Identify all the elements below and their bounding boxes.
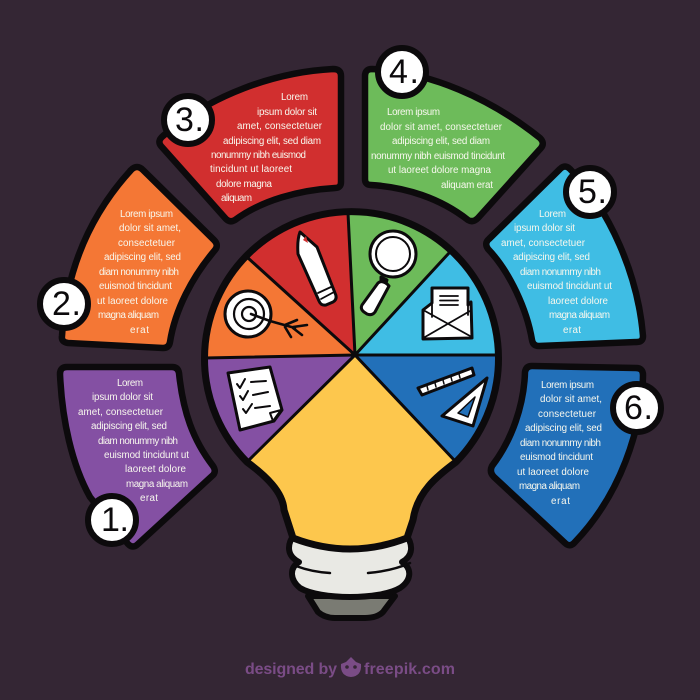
number badge 4: 4. [389,53,419,91]
icon: pencil [298,232,336,305]
panel 6 text: dolor sit amet, [540,394,602,405]
panel 5 text: ipsum dolor sit [514,223,575,234]
icon: checklist [228,367,282,430]
panel 5 text: diam nonummy nibh [520,267,601,278]
watermark: designed by freepik.com: designed by [245,661,337,678]
icon: ruler and set square [418,368,487,426]
watermark: designed by freepik.com: freepik.com [364,661,455,678]
panel 6 text: Lorem ipsum [541,380,594,391]
panel 1: purple [60,367,215,546]
panel 3 text: dolore magna [216,179,273,190]
panel 2 text: Lorem ipsum [120,209,173,220]
panel 2 text [97,209,181,336]
panel 5 text [501,209,612,336]
icon: magnifying glass [361,231,416,315]
number badge 3: 3. [175,101,204,139]
panel 3 text: nonummy nibh euismod [211,150,306,161]
panel 4 text: aliquam erat [441,180,493,191]
panel 4 text: adipiscing elit, sed diam [392,136,490,147]
panel 2 text: euismod tincidunt [99,281,172,292]
panel 6 text: ut laoreet dolore [517,467,590,478]
icon: target and arrow [225,291,307,337]
number badge 3 [164,96,212,144]
panel 6: blue [491,366,643,545]
panel 2 text: adipiscing elit, sed [104,252,181,263]
number badge 5 [566,168,614,216]
panel 4 text: Lorem ipsum [387,107,440,118]
panel 6 text: diam nonummy nibh [520,438,601,449]
panel 2 text: dolor sit amet, [119,223,181,234]
panel 2 text: magna aliquam [98,310,159,321]
icon: envelope with letter [423,288,472,339]
panel 1 text [78,378,189,504]
panel 5 text: erat [563,325,581,336]
number badge 1 [88,496,136,544]
panel 1 text: adipiscing elit, sed [91,421,167,432]
watermark: designed by freepik.com [245,657,455,678]
light bulb wheel [190,200,510,549]
panel 1 text: ipsum dolor sit [92,392,153,403]
panel 4 text: nonummy nibh euismod tincidunt [371,151,505,162]
number badge 1: 1. [101,501,129,539]
panel 2: orange [62,167,217,348]
panel 1 text: laoreet dolore [125,464,187,475]
panel 5 text: adipiscing elit, sed [513,252,590,263]
panel 5 text: Lorem [539,209,566,220]
number badge 5: 5. [578,173,607,211]
panel 3 text: tincidunt ut laoreet [210,164,292,175]
panel 5 text: magna aliquam [549,310,610,321]
panel 3 text: ipsum dolor sit [257,107,317,118]
panel 3 text: adipiscing elit, sed diam [223,136,321,147]
panel 1 text: Lorem [117,378,143,389]
panel 4 text: dolor sit amet, consectetuer [380,122,503,133]
panel 3: red [159,69,341,221]
number badge 2 [40,280,88,328]
panel 4 text: ut laoreet dolore magna [388,165,492,176]
panel 5: light blue [486,166,643,346]
panel 6 text: magna aliquam [519,481,580,492]
panel 5 text: laoreet dolore [548,296,609,307]
panel 1 text: euismod tincidunt ut [104,450,189,461]
panel 5 text: amet, consectetuer [501,238,586,249]
panel 5 text: euismod tincidunt ut [527,281,612,292]
panel 6 text: consectetuer [538,409,597,420]
bulb screw base [289,533,411,618]
panel 3 text: Lorem [281,92,308,103]
panel 3 text: amet, consectetuer [237,121,323,132]
panel 4: green [365,69,543,221]
panel 3 text [210,92,323,204]
number badge 2: 2. [52,285,81,323]
panel 1 text: erat [140,493,158,504]
panel 6 text: euismod tincidunt [520,452,593,463]
panel 6 text [517,380,602,507]
number badge 4 [378,48,426,96]
panel 1 text: amet, consectetuer [78,407,164,418]
panel 4 text [371,107,505,191]
panel 1 text: magna aliquam [126,479,188,490]
number badge 6: 6. [624,389,653,427]
panel 6 text: erat [551,496,570,507]
panel 2 text: consectetuer [118,238,176,249]
panel 3 text: aliquam [221,193,252,204]
panel 2 text: ut laoreet dolore [97,296,169,307]
panel 2 text: diam nonummy nibh [99,267,179,278]
panel 1 text: diam nonummy nibh [98,436,178,447]
panel 6 text: adipiscing elit, sed [525,423,602,434]
number badge 6 [613,384,661,432]
panel 2 text: erat [130,325,149,336]
